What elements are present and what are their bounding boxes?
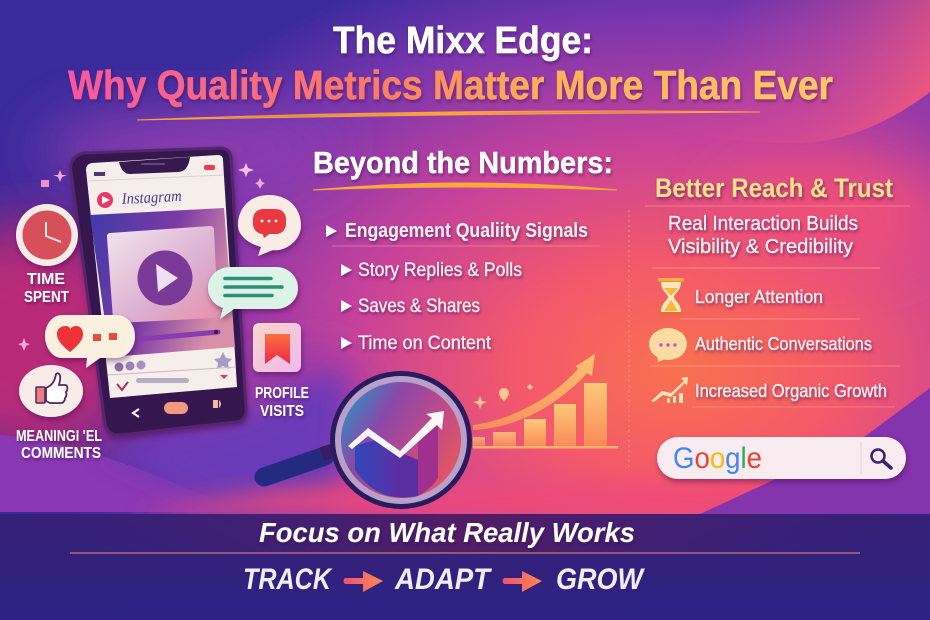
title [68,20,833,120]
heading: beyond the numbers: Beyond the Numbers: [313,145,613,180]
arrow [344,571,383,592]
icon: teal message bubble [208,267,298,319]
icon: speech bubble [649,328,687,362]
title line one: The Mixx Edge: [333,20,593,62]
lens [330,371,472,509]
heading underline [313,183,617,190]
label: time spent: TIME [27,271,65,288]
icon: red chat bubble [238,195,301,256]
trend arrow [348,411,444,458]
item: longer attention: Longer Attention [695,287,823,307]
list: engagement quality signals [326,220,600,354]
engagement row [114,362,124,372]
step: adapt: ADAPT [394,563,492,596]
phone screen: Instagram [120,188,182,208]
label: meaningful comments: COMMENTS [21,445,101,462]
panel description: Real Interaction Builds [668,213,858,235]
instagram header [97,192,113,208]
icon: thumbs up [19,365,83,417]
growth bar chart [473,354,618,448]
label: profile visits [255,385,309,420]
step: track: TRACK [243,563,333,596]
icon: hourglass [658,278,684,316]
item: increased organic growth: Increased Organic Growth [695,381,887,401]
phone nav bar [133,400,221,417]
phone screen [86,155,237,398]
phone illustration [71,148,246,435]
dotted divider [628,210,630,468]
list: engagement quality signals: Time on Content [358,333,492,354]
icon: clock [16,204,78,266]
list: engagement quality signals: Story Replies & Polls [358,260,522,281]
bottom banner [0,514,930,620]
icon: bookmark tile [253,323,301,372]
handle [264,456,325,477]
panel description: Visibility & Credibility [668,236,853,258]
play button [138,250,192,306]
label: time spent [24,271,69,306]
icon: growth arrow [651,377,688,403]
icon: search [872,450,891,468]
growth arrow [473,354,595,430]
search bar [657,437,906,479]
list: engagement quality signals: Engagement Qualiity Signals [345,220,588,242]
video card [107,226,218,323]
label: profile visits: PROFILE [255,385,309,402]
title underline [137,111,760,120]
arrow [502,571,542,592]
sparkles [473,396,487,409]
panel: better reach and trust [645,173,910,407]
label: profile visits: VISITS [260,403,304,420]
panel description [668,213,858,258]
title line two: Why Quality Metrics Matter More Than Ever [68,62,833,108]
magnifying glass [264,371,472,509]
icon: heart message bubble [45,315,135,368]
google wordmark: Google [673,442,762,475]
phone body [71,148,246,435]
progress bar [130,332,218,340]
label: meaningful comments [16,428,102,462]
label: meaningful comments: MEANINGI 'EL [16,428,102,445]
list: engagement quality signals: Saves & Shares [358,296,480,317]
step: grow: GROW [556,563,645,596]
item: authentic conversations: Authentic Conversations [695,334,872,354]
panel heading: Better Reach & Trust [655,173,893,203]
banner heading: Focus on What Really Works [259,517,635,548]
sparkles around phone [18,163,265,351]
lens bars [355,440,395,497]
label: time spent: SPENT [24,289,69,306]
